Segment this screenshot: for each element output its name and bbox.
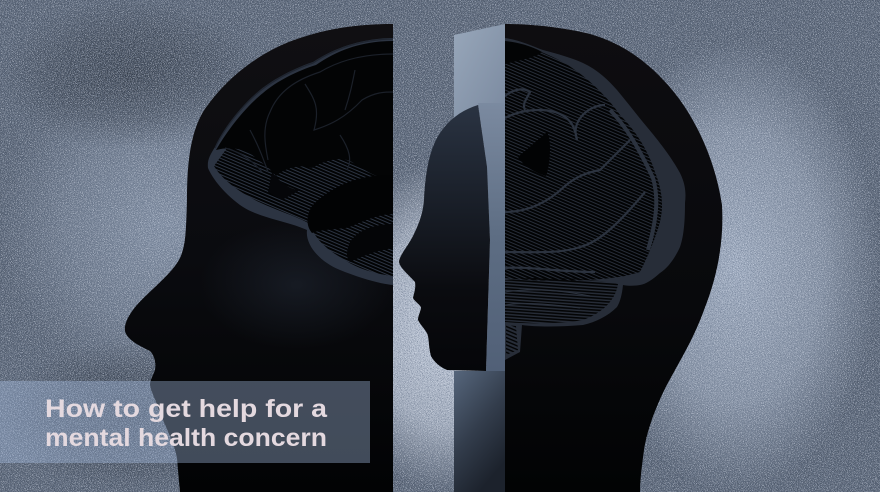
glow inside left head — [238, 246, 356, 326]
central panel: light slab — [454, 24, 505, 492]
left head silhouette with brain — [120, 24, 393, 492]
title banner — [0, 381, 370, 463]
left brain — [208, 38, 393, 285]
right head silhouette with brain — [505, 24, 730, 492]
slab bottom — [454, 371, 505, 492]
right brain — [505, 38, 685, 360]
slab side — [478, 103, 505, 371]
title text: mental health concern — [45, 424, 327, 452]
icon: small face profile silhouette — [399, 105, 490, 371]
slab top — [454, 24, 505, 122]
title text: How to get help for a — [45, 395, 328, 423]
